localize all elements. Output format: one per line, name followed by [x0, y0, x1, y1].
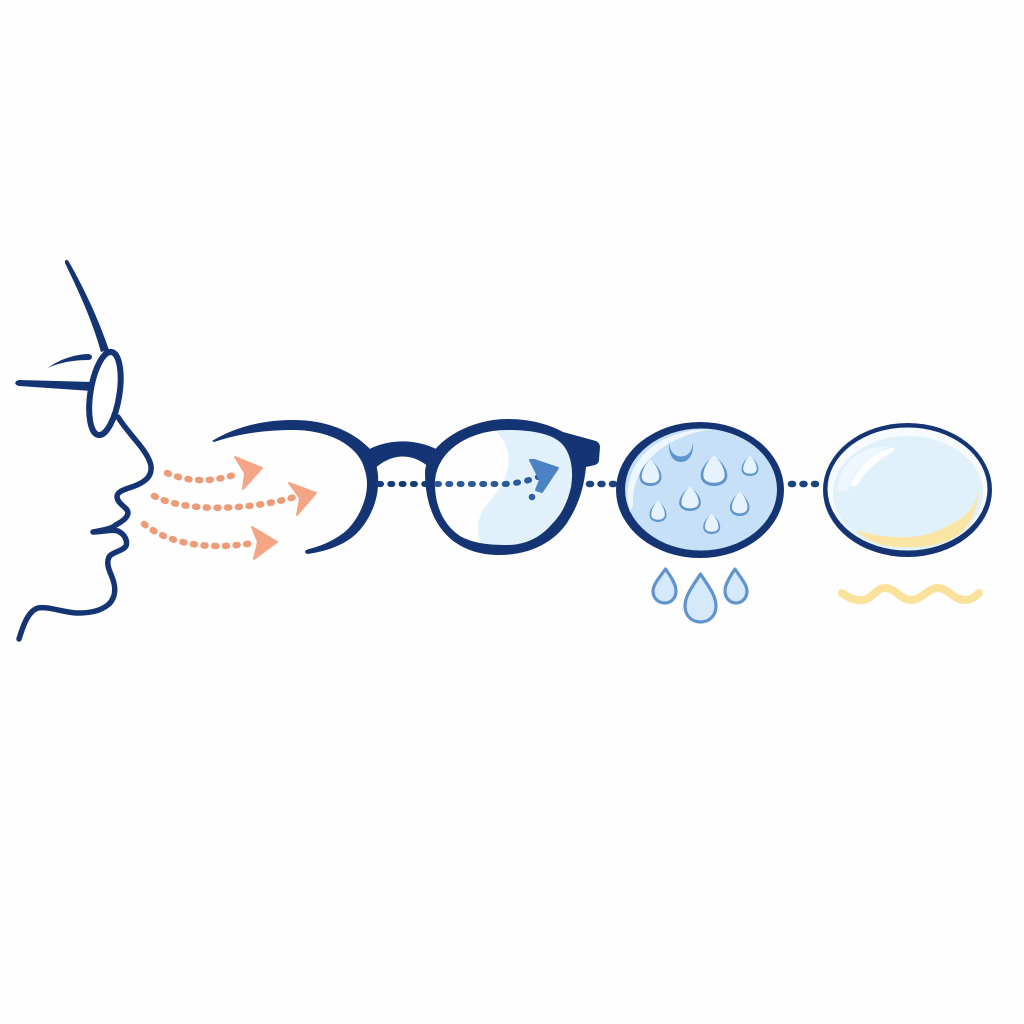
arrow 1: [167, 457, 262, 489]
side-view lens: [84, 350, 126, 437]
arrow 3: [144, 524, 277, 559]
glasses front view: [212, 419, 600, 555]
eyebrow: [48, 354, 92, 368]
sight dotted line with arrow: [379, 460, 558, 500]
glare streak: [851, 448, 894, 487]
rim highlight: [628, 429, 712, 512]
breath arrows: [144, 457, 316, 559]
right frame: [425, 419, 600, 555]
left open frame: [212, 420, 378, 554]
falling water drops: [653, 569, 747, 622]
condensation lens: [616, 422, 784, 558]
water droplets on lens: [640, 442, 758, 534]
bridge: [366, 441, 442, 470]
forehead line: [65, 260, 109, 352]
clear coated lens: [823, 423, 992, 557]
yellow wavy line: [842, 588, 979, 600]
right lens fog: [478, 430, 572, 545]
glasses temple arm: [15, 380, 93, 391]
arrow 2: [154, 483, 316, 515]
connecting dots: [589, 481, 818, 487]
nose, lips and chin outline: [19, 417, 151, 639]
pale glare band: [838, 446, 890, 492]
blue arrowhead: [530, 460, 558, 492]
diagram: breath fogging glasses: [15, 260, 992, 642]
yellow oil crescent: [857, 488, 980, 547]
face profile with side glasses: [15, 260, 151, 639]
